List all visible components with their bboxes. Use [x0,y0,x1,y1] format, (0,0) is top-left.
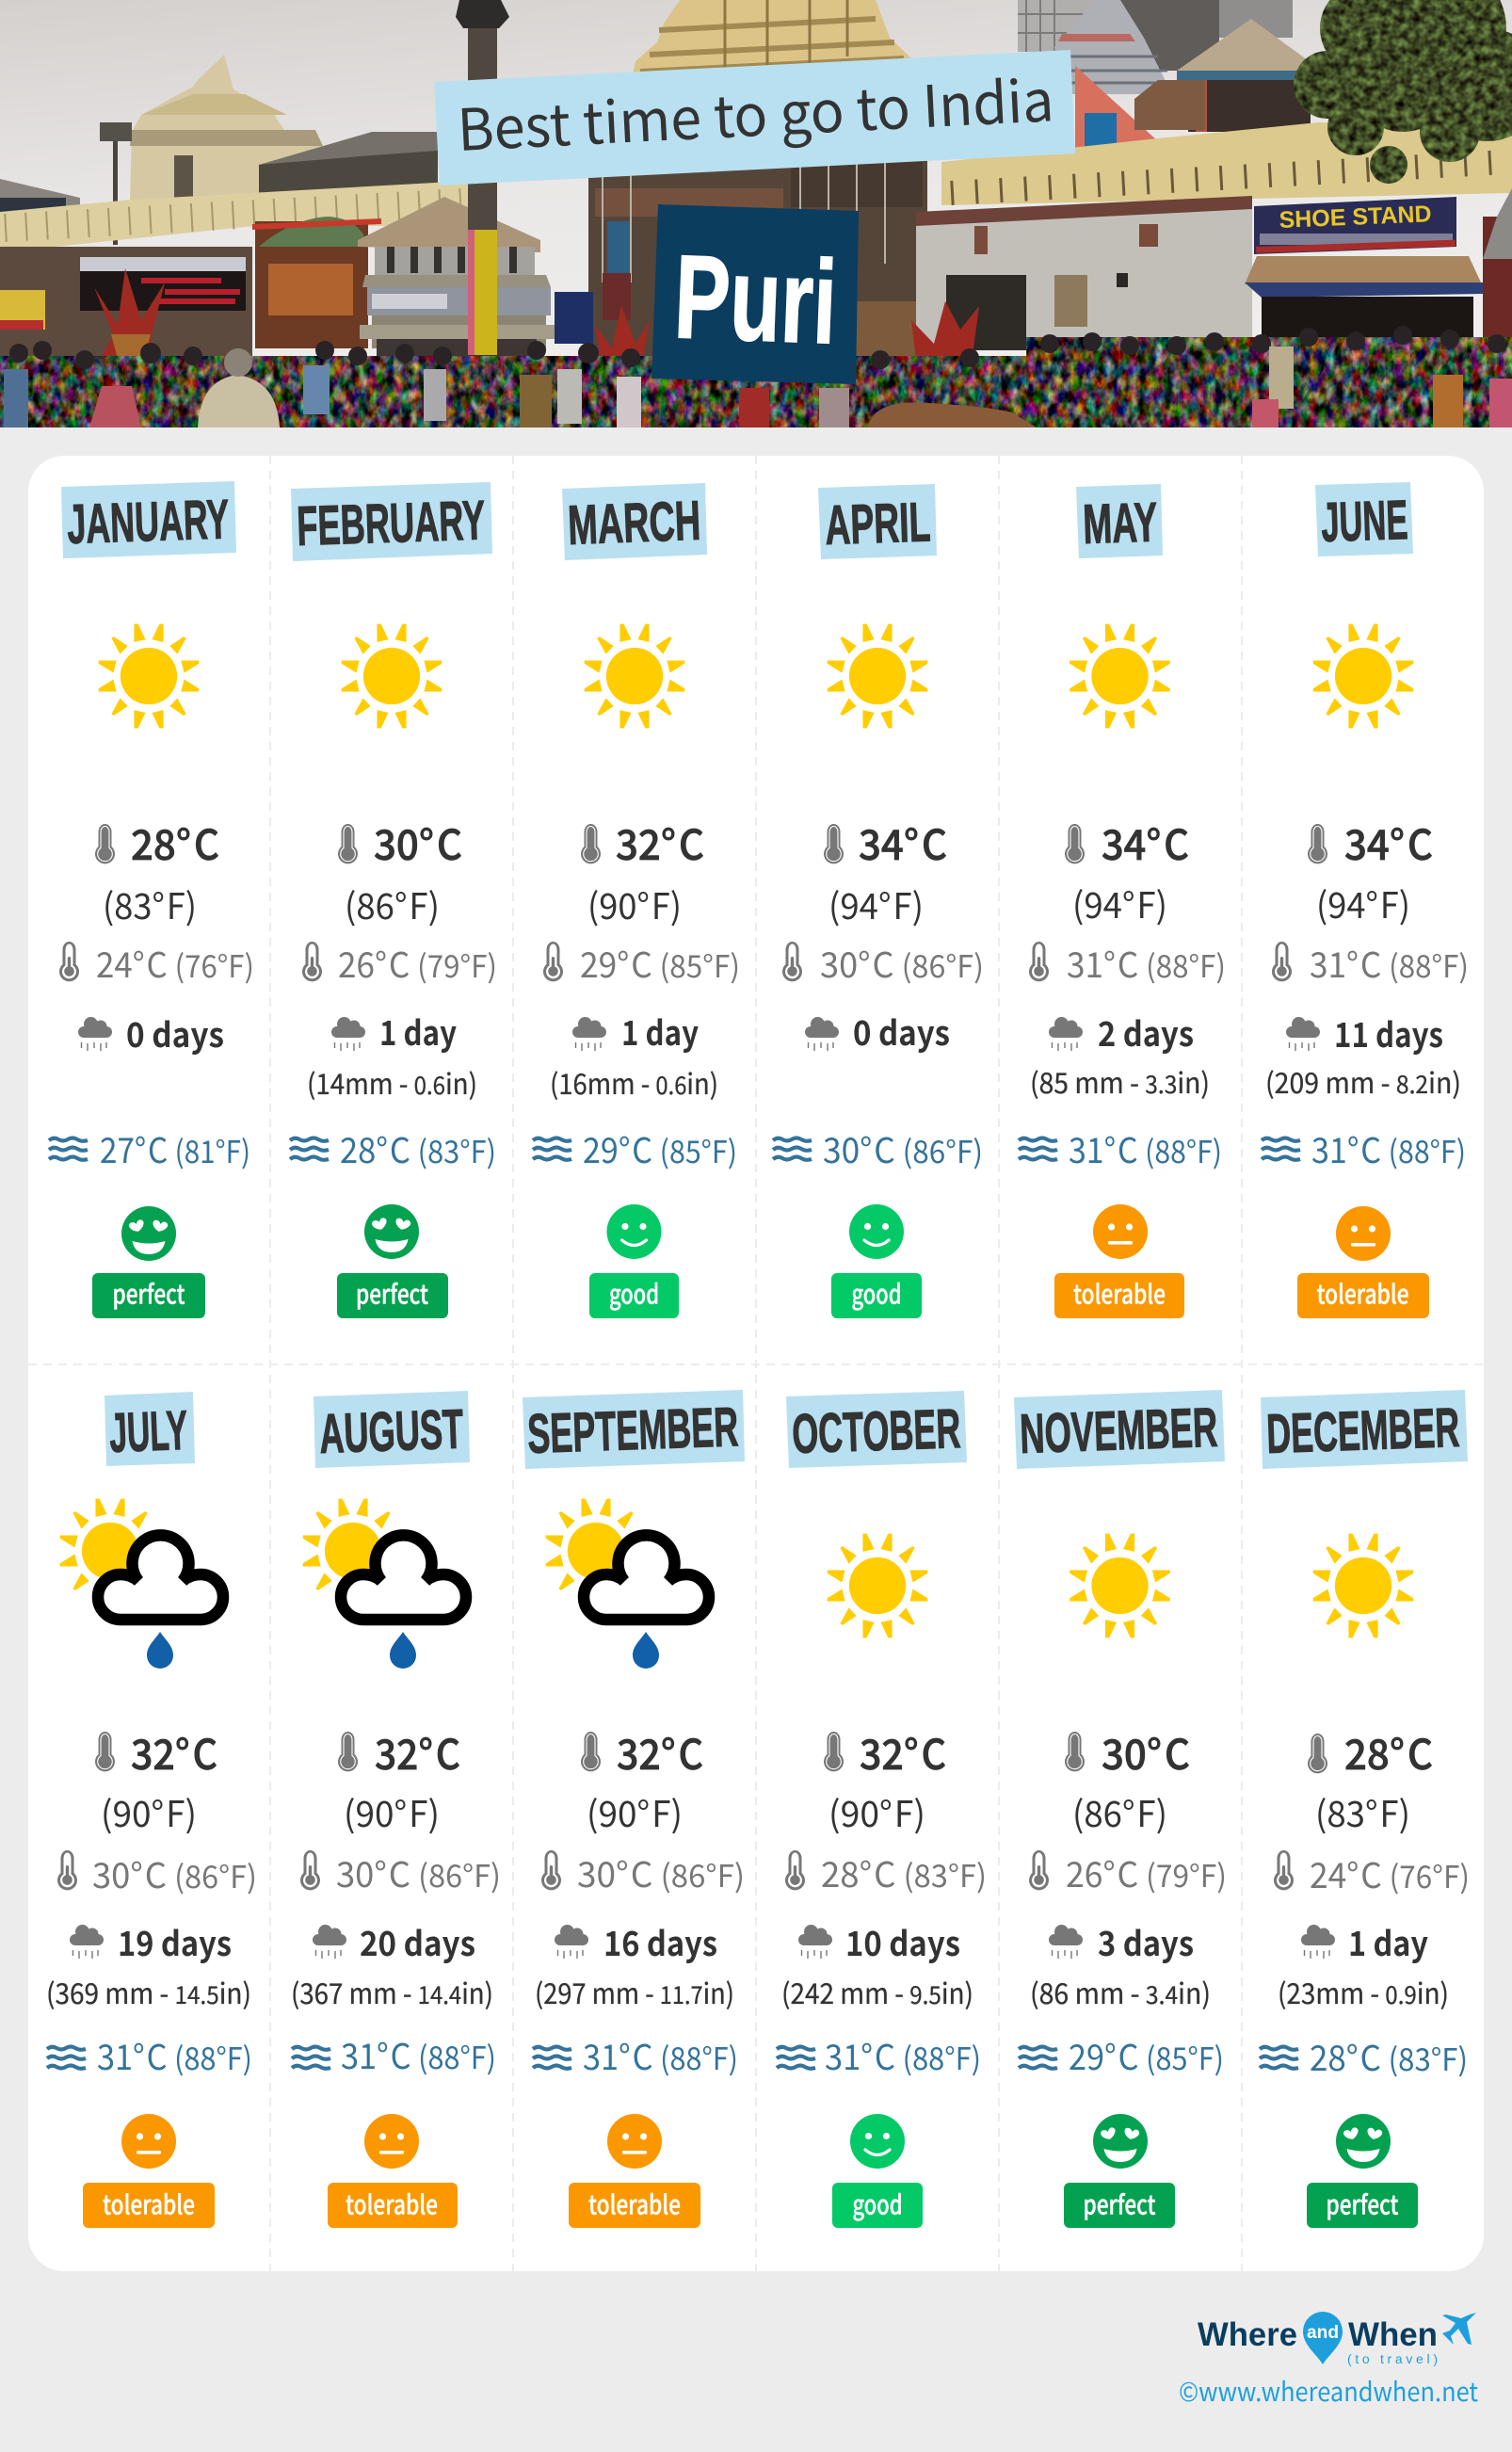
rainy days and rainfall: 19 days [118,1917,232,1966]
month label: July: JULY [108,1399,188,1464]
sea temperature: 31°C (88°F) [341,2028,496,2079]
rainy days and rainfall: 16 days [603,1917,717,1966]
max temperature: (90°F) [101,1785,197,1837]
rainy days and rainfall [1278,1917,1449,2012]
panel: December [1260,1390,1470,2228]
max temperature: (90°F) [828,1785,925,1837]
photo detail: shoe stand sign [1254,197,1456,254]
rainy days and rainfall: 1 day [1348,1917,1428,1966]
panel: June [1262,482,1469,1318]
max temperature: 32°C [617,1721,703,1782]
icon: sun [1313,624,1413,728]
rainy days and rainfall [535,1917,734,2012]
panel: July [46,1392,257,2228]
max temperature: (90°F) [587,1785,683,1837]
sea temperature: 31°C (88°F) [97,2029,252,2080]
max temperature: 34°C [1102,812,1189,872]
month label: September [523,1390,745,1469]
max temperature: 28°C [131,812,219,872]
min temperature: 31°C (88°F) [1067,937,1226,988]
max temperature: 32°C [860,1721,946,1782]
panel: February [290,482,497,1318]
panel: March [533,483,740,1318]
month label: November [1014,1390,1225,1469]
icon: sun behind rain cloud [303,1499,466,1669]
rating: perfect: perfect [1326,2185,1399,2222]
sea temperature: 28°C (83°F) [1310,2030,1468,2081]
icon: sun [1070,1534,1170,1637]
website credit: ©www.whereandwhen.net [1179,2372,1478,2410]
month label: February: FEBRUARY [296,489,486,557]
header photo: Puri temple street scene [0,0,1512,427]
footer logo: Where and When: When [1348,2316,1438,2353]
rating: tolerable: tolerable [103,2185,195,2222]
month label: February [291,482,492,561]
rainy days: 0 days [126,1008,224,1057]
month label: March [562,483,707,560]
min temperature: 24°C (76°F) [96,937,254,988]
month label: August [314,1391,470,1468]
sea temperature: 31°C (88°F) [825,2029,981,2080]
rating: good: good [851,1275,902,1313]
rating: perfect [337,1204,448,1318]
icon: sun behind rain cloud [60,1499,223,1669]
max temperature: (90°F) [587,878,682,929]
panel: October [777,1391,987,2228]
rating: tolerable [328,2114,458,2228]
rainy days and rainfall [46,1917,251,2012]
min temperature: 26°C (79°F) [1066,1847,1227,1897]
max temperature: 28°C [1344,1721,1433,1782]
rainy days and rainfall [1265,1008,1461,1102]
rating: good: good [609,1275,659,1313]
rainy days and rainfall: 2 days [1098,1008,1194,1057]
panel: April [773,484,984,1318]
month label: April: APRIL [824,491,931,557]
rating: good: good [853,2185,902,2222]
rating: tolerable: tolerable [588,2185,681,2222]
rating: perfect [1064,2114,1175,2228]
rating: tolerable [1297,1206,1429,1318]
max temperature: (90°F) [344,1785,440,1837]
max temperature [95,812,219,929]
rainy days and rainfall: 1 day [379,1007,457,1056]
rainy days [805,1007,950,1056]
month label: May: MAY [1082,491,1158,556]
rating: tolerable: tolerable [1073,1275,1166,1313]
rating: tolerable [1054,1204,1184,1318]
footer logo: Where and When: (to travel) [1347,2351,1438,2366]
rainy days and rainfall: 20 days [360,1917,475,1966]
panel: August [291,1391,501,2228]
footer logo: Where and When: and [1307,2323,1339,2343]
photo detail: crowd [0,326,1512,427]
min temperature: 30°C (86°F) [336,1847,501,1897]
rainy days: 0 days [853,1007,950,1056]
month label: January [61,481,236,558]
min temperature: 24°C (76°F) [1310,1847,1470,1898]
rainy days and rainfall [307,1007,477,1103]
rainy days and rainfall: 1 day [621,1007,699,1056]
month label: May [1076,484,1163,558]
rainy days and rainfall: (23mm - 0.9in) [1278,1971,1449,2012]
rainy days and rainfall: (14mm - 0.6in) [307,1061,477,1103]
max temperature: (94°F) [828,878,924,929]
rating: perfect: perfect [113,1275,185,1313]
footer logo: Where and When [1198,2312,1476,2366]
min temperature: 30°C (86°F) [92,1847,257,1898]
rating: perfect: perfect [1083,2185,1156,2222]
rainy days and rainfall [550,1007,718,1103]
icon: sun [585,624,684,728]
rating: good [589,1204,679,1318]
rainy days and rainfall: 3 days [1098,1917,1194,1966]
rainy days and rainfall: (242 mm - 9.5in) [781,1971,973,2012]
sea temperature: 31°C (88°F) [583,2029,738,2080]
rainy days and rainfall [781,1917,973,2012]
footer logo: Where and When: Where [1198,2316,1297,2353]
month label: August: AUGUST [318,1397,464,1465]
min temperature: 31°C (88°F) [1310,937,1469,988]
month label: June [1315,482,1413,557]
month label: October: OCTOBER [791,1397,961,1465]
photo detail: shoe stand sign: SHOE STAND [1279,201,1432,234]
rating: tolerable: tolerable [346,2185,438,2222]
max temperature: (86°F) [1072,1785,1167,1837]
rainy days and rainfall: (85 mm - 3.3in) [1030,1060,1210,1102]
max temperature: 32°C [616,812,704,872]
rainy days and rainfall: 11 days [1334,1008,1443,1057]
month label: April [818,484,937,559]
city name block: Puri [672,230,839,369]
sea temperature: 27°C (81°F) [100,1122,250,1173]
min temperature: 26°C (79°F) [338,937,497,988]
max temperature [1308,812,1433,928]
month label: January: JANUARY [66,488,230,556]
icon: sun [342,624,442,728]
rainy days and rainfall: (86 mm - 3.4in) [1030,1971,1211,2012]
photo detail: tree [1294,0,1512,184]
icon: sun [1070,624,1170,728]
min temperature: 30°C (86°F) [820,937,984,988]
max temperature: (83°F) [103,878,197,929]
rainy days [78,1008,224,1057]
title banner: Best time to go to India [455,54,1055,168]
max temperature: (86°F) [345,878,440,929]
rainy days and rainfall: (369 mm - 14.5in) [46,1971,251,2012]
max temperature [95,1721,217,1837]
main white card [28,456,1484,2271]
max temperature: 30°C [374,812,462,872]
rainy days and rainfall: (367 mm - 14.4in) [291,1971,493,2012]
max temperature [1065,812,1189,928]
rainy days and rainfall: (297 mm - 11.7in) [535,1971,734,2012]
max temperature [824,1721,946,1837]
rating: perfect [1307,2114,1418,2228]
sea temperature: 28°C (83°F) [340,1122,496,1173]
rating: perfect [92,1206,205,1318]
max temperature: 34°C [1344,812,1433,872]
rainy days and rainfall: (16mm - 0.6in) [550,1061,718,1103]
rainy days and rainfall [1030,1008,1210,1102]
sea temperature: 31°C (88°F) [1069,1122,1222,1173]
icon: sun [828,624,927,728]
max temperature: 32°C [375,1721,460,1782]
panel: November [1014,1390,1227,2228]
rating: good [832,2114,923,2228]
rainy days and rainfall: 10 days [845,1917,960,1966]
max temperature: 34°C [859,812,947,872]
icon: sun [1313,1534,1413,1637]
panel: January [49,481,254,1318]
rating: tolerable: tolerable [1316,1275,1408,1313]
sea temperature: 29°C (85°F) [1069,2029,1224,2080]
sea temperature: 30°C (86°F) [823,1122,983,1173]
max temperature [581,812,704,929]
rainy days and rainfall [1030,1917,1211,2012]
sea temperature: 29°C (85°F) [583,1122,737,1173]
month label: November: NOVEMBER [1019,1396,1218,1465]
month label: March: MARCH [567,490,701,557]
max temperature [824,812,947,929]
rainy days and rainfall: (209 mm - 8.2in) [1265,1060,1461,1102]
max temperature [1308,1721,1433,1837]
month label: September: SEPTEMBER [526,1395,739,1465]
month label: October [786,1391,967,1468]
rating: perfect: perfect [356,1275,428,1313]
rating: tolerable [569,2114,700,2228]
rainy days and rainfall [291,1917,493,2012]
max temperature: (83°F) [1315,1785,1410,1837]
max temperature [581,1721,703,1837]
min temperature: 30°C (86°F) [577,1847,745,1897]
month label: June: JUNE [1320,489,1408,554]
icon: sun [99,624,199,728]
max temperature: (94°F) [1316,877,1410,928]
rating: tolerable [83,2114,215,2228]
max temperature [1065,1721,1190,1837]
sea temperature: 31°C (88°F) [1311,1122,1466,1173]
city name block [651,204,859,384]
icon: sun [828,1534,927,1637]
max temperature [338,1721,460,1837]
panel: May [1019,484,1226,1318]
max temperature: 32°C [131,1721,217,1782]
max temperature: (94°F) [1072,877,1167,928]
max temperature [338,812,462,929]
month label: July [105,1392,195,1466]
min temperature: 29°C (85°F) [580,937,740,988]
max temperature: 30°C [1102,1721,1190,1782]
rating: good [831,1204,922,1318]
icon: sun behind rain cloud [546,1499,709,1669]
min temperature: 28°C (83°F) [821,1847,987,1897]
panel: September [523,1390,745,2228]
